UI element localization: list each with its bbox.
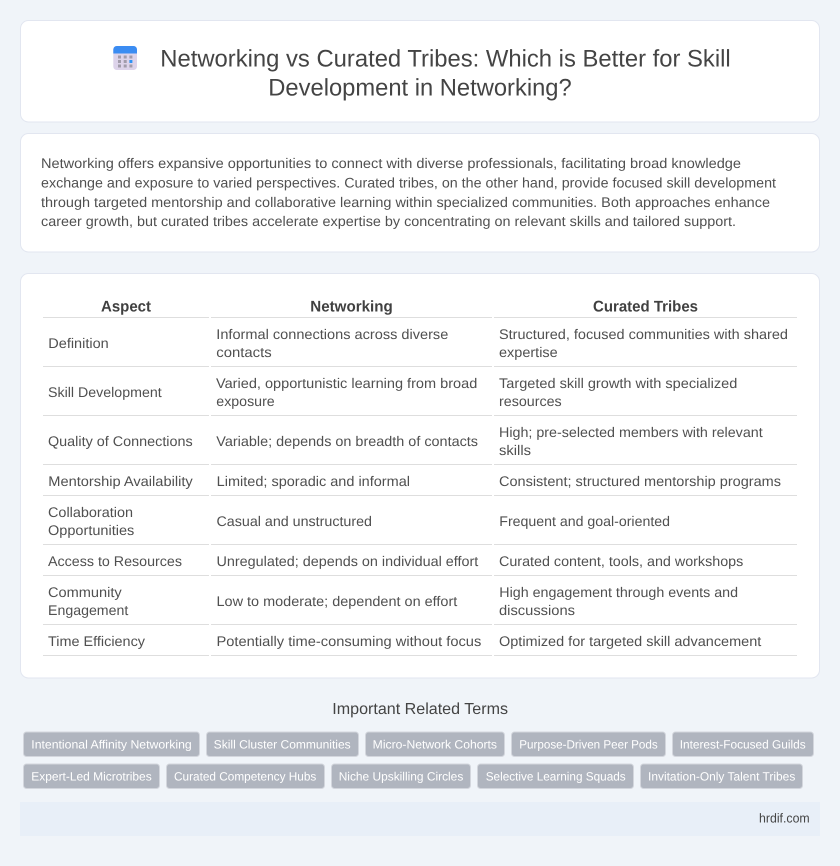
row: definition (48, 326, 788, 360)
tag (206, 732, 358, 756)
row: skill development: Skill Development (48, 384, 162, 400)
row: quality of connections: High; pre-selected members with relevant (499, 424, 763, 440)
row: skill development (48, 375, 737, 409)
row: community engagement (48, 584, 738, 618)
row: collaboration opportunities (48, 504, 670, 538)
row: community engagement: discussions (499, 602, 575, 618)
tag: Interest-Focused Guilds (680, 737, 806, 751)
row: skill development: Targeted skill growth with specialized (499, 375, 737, 391)
row: definition: Informal connections across diverse (216, 326, 449, 342)
row: access to resources (48, 553, 743, 569)
tag (512, 732, 666, 756)
row: community engagement: Low to moderate; dependent on effort (216, 593, 457, 609)
row: definition: contacts (216, 344, 272, 360)
row: access to resources: Unregulated; depends on individual effort (216, 553, 478, 569)
row: collaboration opportunities: Frequent and goal-oriented (499, 513, 670, 529)
tags: related terms (24, 732, 814, 788)
tag: Curated Competency Hubs (174, 769, 316, 783)
row: community engagement: Community (48, 584, 122, 600)
row: definition: Structured, focused communities with shared (499, 326, 788, 342)
tag: Niche Upskilling Circles (339, 769, 463, 783)
icon: calendar (113, 46, 137, 70)
title: Networking vs Curated Tribes: Which is Better for Skill (160, 46, 731, 72)
text block: introduction paragraph: career growth, but curated tribes accelerate expertise by concentrating on relevant skills and tailored support. (41, 213, 736, 229)
row: quality of connections: Quality of Connections (48, 433, 193, 449)
text block: introduction paragraph: through targeted mentorship and collaborative learning within specialized communities. Both approaches enhance (41, 194, 770, 210)
row: time efficiency (48, 633, 761, 649)
tag (332, 764, 470, 788)
tag: Skill Cluster Communities (214, 737, 351, 751)
tag (366, 732, 504, 756)
row: time efficiency: Time Efficiency (48, 633, 145, 649)
text block: introduction paragraph: Networking offers expansive opportunities to connect with diverse professionals, facilitating broad knowledge (41, 155, 741, 171)
tag: Intentional Affinity Networking (31, 737, 192, 751)
panel: introduction (20, 134, 820, 252)
table header row: Curated Tribes (593, 298, 698, 316)
tag: Micro-Network Cohorts (373, 737, 497, 751)
tag: Expert-Led Microtribes (31, 769, 152, 783)
row: mentorship availability: Mentorship Availability (48, 473, 193, 489)
tag: Invitation-Only Talent Tribes (648, 769, 795, 783)
text block: introduction paragraph: exchange and exposure to varied perspectives. Curated tribes, on the other hand, provide focused skill development (41, 174, 776, 190)
tag (672, 732, 814, 756)
row: community engagement: High engagement through events and (499, 584, 738, 600)
row: time efficiency: Optimized for targeted skill advancement (499, 633, 761, 649)
panel: comparison table (20, 274, 820, 678)
row: skill development: exposure (216, 393, 275, 409)
row: community engagement: Engagement (48, 602, 128, 618)
row: quality of connections: skills (499, 442, 531, 458)
row: access to resources: Curated content, tools, and workshops (499, 553, 743, 569)
row: mentorship availability (48, 473, 781, 489)
footer source text: hrdif.com (759, 811, 810, 826)
title (160, 46, 731, 102)
row: mentorship availability: Consistent; structured mentorship programs (499, 473, 781, 489)
tag (24, 732, 200, 756)
row: quality of connections: Variable; depends on breadth of contacts (216, 433, 478, 449)
footer band (20, 802, 820, 836)
tag (478, 764, 634, 788)
tag (640, 764, 802, 788)
table header row: Networking (310, 298, 393, 316)
text block: introduction paragraph (41, 155, 776, 229)
tag: Purpose-Driven Peer Pods (519, 737, 658, 751)
tag: Selective Learning Squads (486, 769, 626, 783)
row: skill development: Varied, opportunistic learning from broad (216, 375, 477, 391)
table rules (43, 317, 797, 656)
row: collaboration opportunities: Casual and unstructured (216, 513, 372, 529)
tag (166, 764, 324, 788)
heading: important related terms: Important Related Terms (332, 701, 508, 718)
row: skill development: resources (499, 393, 562, 409)
row: time efficiency: Potentially time-consuming without focus (216, 633, 481, 649)
row: mentorship availability: Limited; sporadic and informal (217, 473, 410, 489)
row: definition: Definition (48, 335, 109, 351)
table header row: Aspect (101, 298, 151, 316)
panel: title header (20, 20, 820, 122)
row: quality of connections (48, 424, 763, 458)
row: collaboration opportunities: Opportunities (48, 522, 134, 538)
row: access to resources: Access to Resources (48, 553, 182, 569)
tag (24, 764, 160, 788)
title: Development in Networking? (268, 74, 572, 102)
row: collaboration opportunities: Collaboration (48, 504, 133, 520)
table header row (101, 298, 698, 316)
row: definition: expertise (499, 344, 558, 360)
